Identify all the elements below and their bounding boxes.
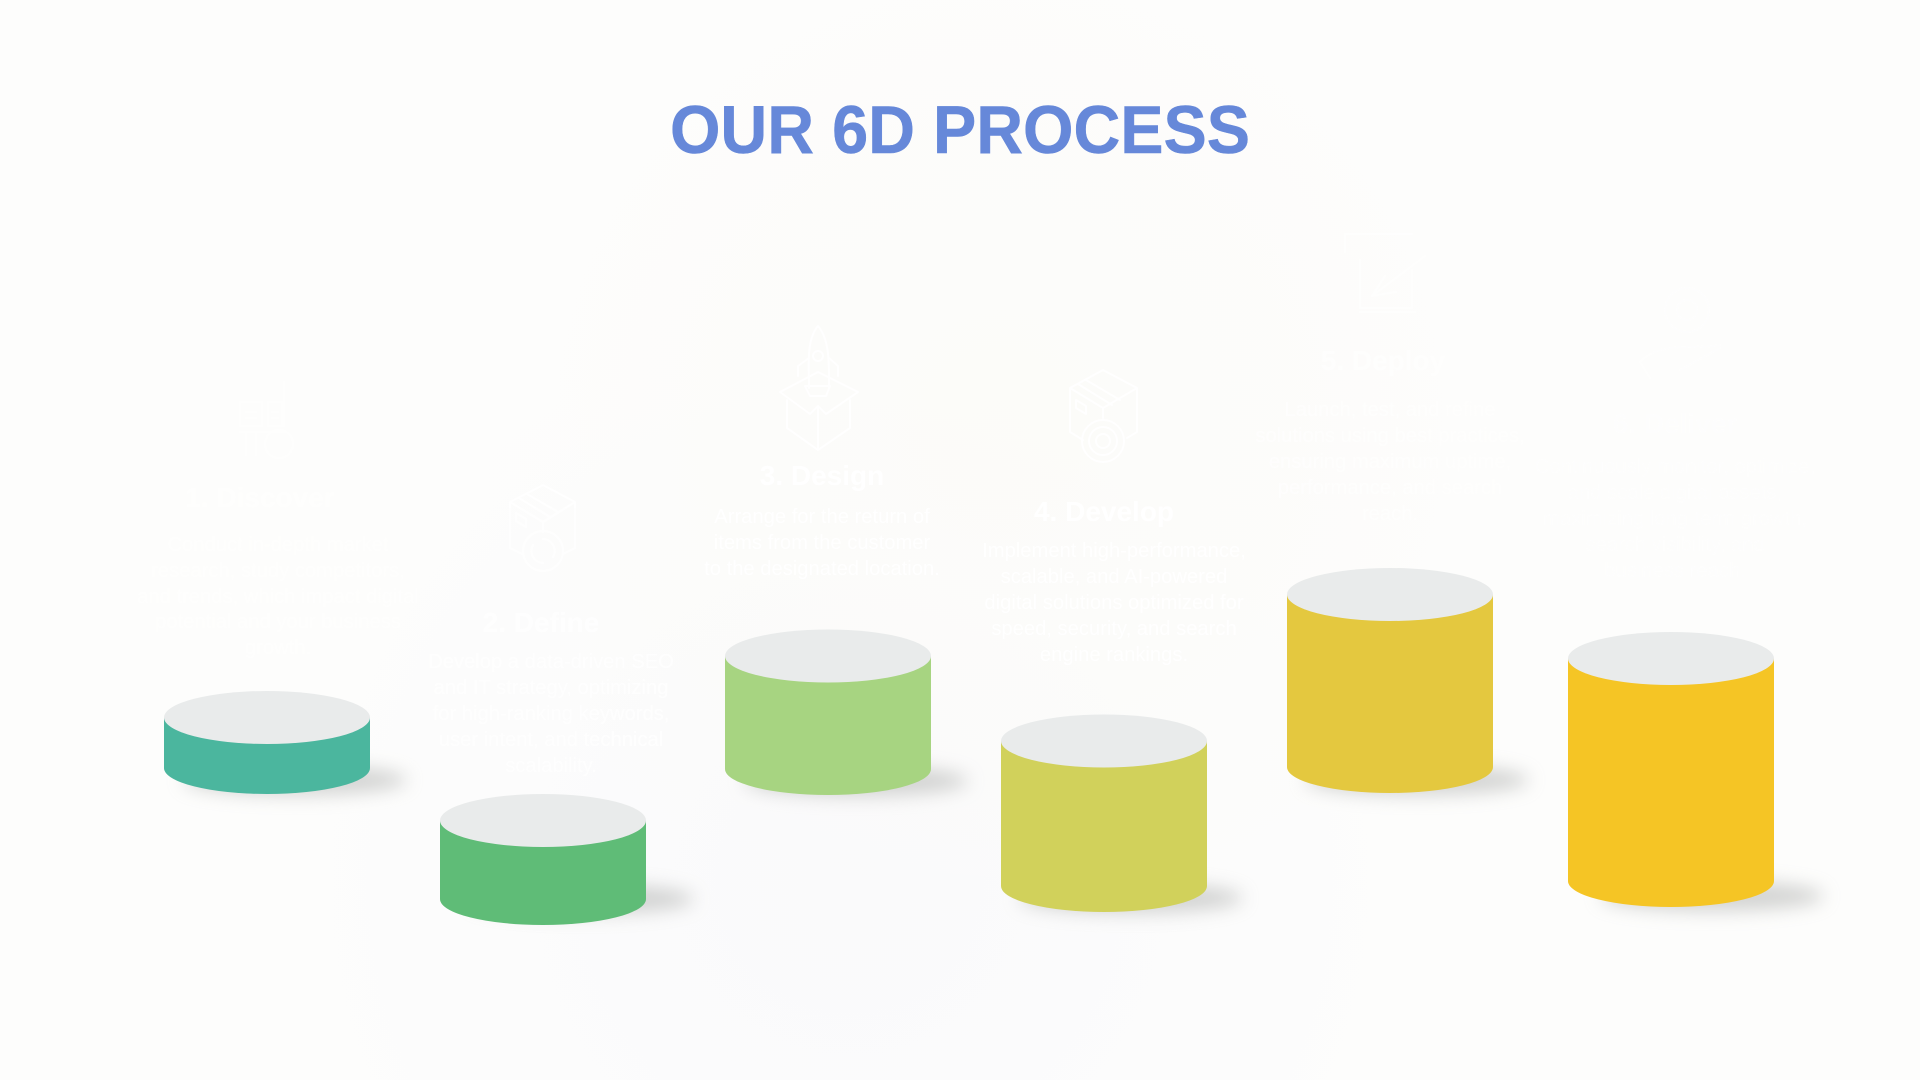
heading: 6. Deliver	[1613, 408, 1737, 439]
step 2: define	[428, 485, 674, 777]
step 6: deliver	[1535, 288, 1815, 582]
description: potential and your business	[155, 611, 401, 633]
step 3: design	[704, 326, 940, 580]
description: and trends, which impact digital	[137, 586, 419, 608]
description: solutions using best practices,	[1255, 425, 1525, 447]
description: maximizing long-term growth,	[1543, 508, 1807, 530]
description: business reach.	[1604, 560, 1746, 582]
heading: 2. Define	[483, 607, 599, 638]
description: and IT strategy, optimizing	[434, 677, 668, 699]
description: digital solutions optimized for	[984, 592, 1244, 614]
description: reach.	[1362, 503, 1418, 525]
heading: 1. Discover	[185, 482, 335, 513]
description: user intent, and technical	[439, 729, 663, 751]
description: engine rankings.	[1040, 644, 1188, 666]
description: performance, and search	[1278, 477, 1502, 499]
description: for high-ranking keywords,	[433, 703, 669, 725]
icon: box with target	[1070, 370, 1137, 462]
heading: 5. Deploy	[1321, 345, 1446, 376]
step 1: discover	[137, 382, 419, 659]
description: Develop a data-driven SEO	[428, 651, 674, 673]
description: Launch, test, and refine	[1284, 399, 1496, 421]
description: Conduct in-depth market	[167, 534, 389, 556]
description: to the designated location.	[704, 558, 940, 580]
description: Continuously monitor, optimize,	[1535, 456, 1815, 478]
icon: laptop with launch arrow	[1345, 234, 1425, 312]
icon: buildings and gear	[240, 382, 293, 458]
description: research, study competitors,	[151, 560, 405, 582]
icon: box with refresh dial	[510, 485, 575, 571]
cylinder 1	[164, 691, 407, 795]
cylinder 6	[1568, 632, 1824, 911]
heading: 4. Develop	[1034, 496, 1174, 527]
description: scalable, and AI-powered	[1001, 566, 1227, 588]
cylinder 5	[1287, 568, 1529, 795]
description: Arrange for the return of	[714, 506, 930, 528]
description: and scale digital assets,	[1568, 482, 1782, 504]
title: OUR 6D PROCESS	[670, 92, 1250, 168]
icon: target and hands	[1640, 288, 1720, 378]
description: growth.	[245, 637, 311, 659]
description: speed, security, and search	[991, 618, 1237, 640]
step 4: develop	[982, 370, 1246, 666]
description: scalability.	[505, 755, 597, 777]
cylinder 3	[725, 630, 968, 796]
cylinder 2	[440, 794, 694, 925]
description: items from the customer	[714, 532, 931, 554]
description: ensuring maximum uptime,	[1269, 451, 1511, 473]
icon: rocket from box	[780, 326, 858, 450]
description: Implement high-performance,	[982, 540, 1246, 562]
step 5: deploy	[1255, 234, 1525, 525]
description: search visibility, and	[1585, 534, 1765, 556]
heading: 3. Design	[760, 460, 884, 491]
cylinder 4	[1001, 714, 1243, 913]
